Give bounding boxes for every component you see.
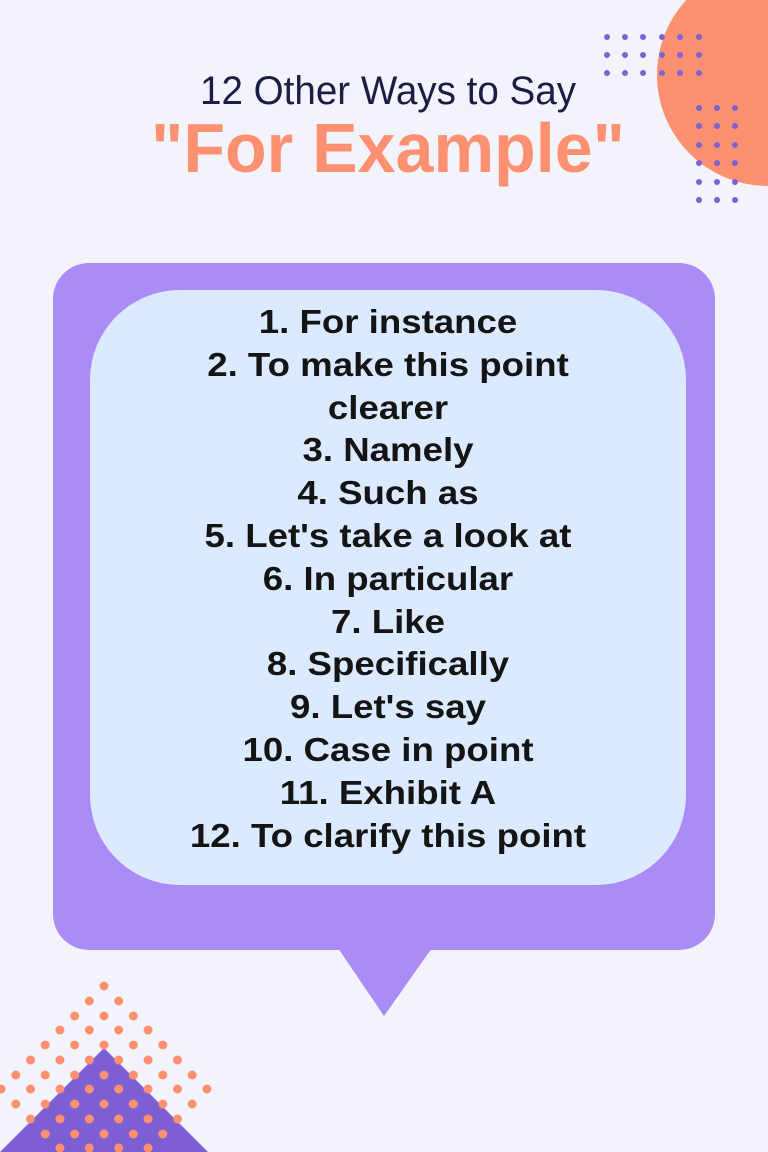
- list of phrases: clearer: [328, 389, 448, 426]
- list of phrases: 12. To clarify this point: [190, 817, 586, 854]
- decoration: top-right circle and dots: [604, 0, 768, 203]
- subtitle: 12 Other Ways to Say: [200, 69, 576, 113]
- list of phrases: 3. Namely: [302, 431, 474, 468]
- list of phrases: 6. In particular: [263, 560, 513, 597]
- list of phrases: 5. Let's take a look at: [204, 517, 572, 554]
- list of phrases: [190, 303, 586, 854]
- main heading: "For Example": [151, 109, 625, 187]
- list of phrases: 10. Case in point: [242, 731, 534, 768]
- list of phrases: 7. Like: [331, 603, 445, 640]
- list of phrases: 11. Exhibit A: [280, 774, 496, 811]
- decoration: bottom-left triangle with dots: [0, 982, 212, 1152]
- list of phrases: 8. Specifically: [267, 645, 509, 682]
- title: [151, 69, 625, 187]
- list of phrases: 1. For instance: [259, 303, 517, 340]
- list of phrases: 2. To make this point: [207, 346, 569, 383]
- list of phrases: 4. Such as: [297, 474, 479, 511]
- list of phrases: 9. Let's say: [290, 688, 486, 725]
